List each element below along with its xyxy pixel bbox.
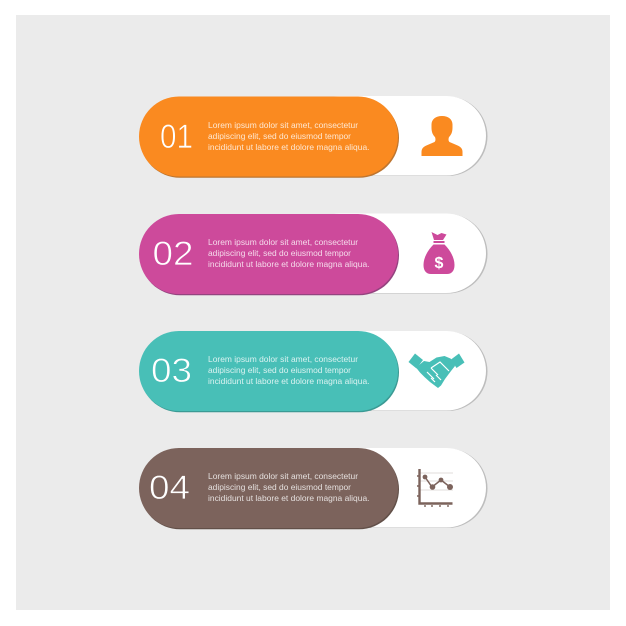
icon: money bag: $ — [435, 255, 444, 272]
row 2 — [139, 214, 488, 295]
teal pill 3 — [139, 331, 399, 412]
white pill 4 — [300, 448, 488, 528]
text block 3: Lorem ipsum dolor sit amet, consectetur — [208, 354, 358, 364]
text block 3: adipiscing elit, sed do eiusmod tempor — [208, 365, 351, 375]
white pill 2 — [300, 214, 488, 294]
magenta pill 2 — [139, 214, 399, 295]
number 04: 04 — [149, 469, 190, 507]
row 4 — [139, 448, 488, 529]
icon: person — [422, 116, 462, 156]
white pill 1 — [300, 96, 488, 176]
text block 2: Lorem ipsum dolor sit amet, consectetur — [208, 237, 358, 247]
icon: money bag — [424, 232, 454, 274]
number 02: 02 — [152, 235, 194, 273]
white pill 3 — [300, 331, 488, 411]
orange pill 1 — [139, 96, 399, 178]
icon: handshake — [408, 354, 464, 388]
text block 4: adipiscing elit, sed do eiusmod tempor — [208, 482, 351, 492]
row 1 — [139, 96, 488, 178]
number 01: 01 — [160, 118, 193, 156]
row 3 — [139, 331, 488, 412]
text block 1: adipiscing elit, sed do eiusmod tempor — [208, 131, 351, 141]
text block 3 — [208, 354, 370, 386]
icon: line chart — [417, 469, 453, 507]
text block 1: Lorem ipsum dolor sit amet, consectetur — [208, 120, 358, 130]
text block 1 — [208, 120, 370, 152]
text block 4: incididunt ut labore et dolore magna aliqua. — [208, 493, 370, 503]
text block 2: incididunt ut labore et dolore magna aliqua. — [208, 259, 370, 269]
text block 2: adipiscing elit, sed do eiusmod tempor — [208, 248, 351, 258]
text block 4 — [208, 471, 370, 503]
text block 1: incididunt ut labore et dolore magna aliqua. — [208, 142, 370, 152]
text block 2 — [208, 237, 370, 269]
text block 4: Lorem ipsum dolor sit amet, consectetur — [208, 471, 358, 481]
brown pill 4 — [139, 448, 399, 529]
text block 3: incididunt ut labore et dolore magna aliqua. — [208, 376, 370, 386]
number 03: 03 — [151, 352, 192, 390]
